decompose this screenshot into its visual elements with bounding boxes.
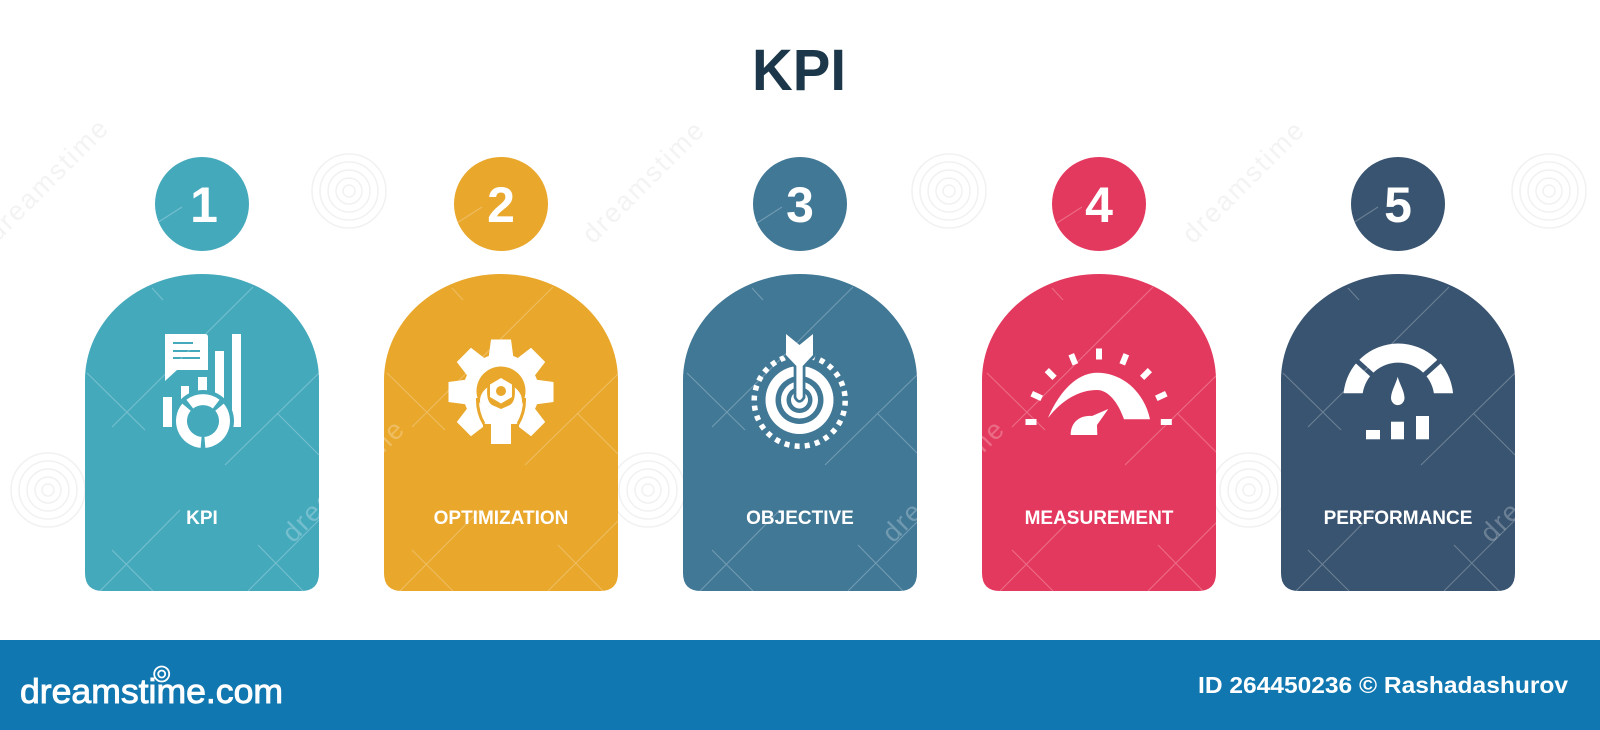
logo: dreamstime.com: dreamstime.com: [20, 673, 283, 711]
panel: step 5 Performance: [1281, 157, 1515, 591]
number badge 5: 5: [1384, 177, 1412, 233]
number badge 1: 1: [190, 177, 218, 233]
number badge 2: 2: [487, 177, 515, 233]
card 5: [1281, 274, 1515, 591]
number badge 3: 3: [786, 177, 814, 233]
icon: performance gauge with drop and bars: [1344, 344, 1453, 439]
infographic canvas: dreamstime: [576, 114, 711, 249]
icon: chart with speech bubble and donut: [163, 334, 241, 452]
panel: step 2 Optimization: [384, 157, 618, 591]
label: Optimization: OPTIMIZATION: [434, 508, 568, 529]
icon: target with arrow: [754, 334, 845, 446]
card 3: [683, 274, 917, 591]
number badge 5: [1351, 157, 1445, 251]
infographic canvas: dreamstime: [876, 413, 1011, 548]
label: KPI: KPI: [186, 508, 218, 529]
number badge 4: 4: [1085, 177, 1113, 233]
card 4: [982, 274, 1216, 591]
label: Measurement: MEASUREMENT: [1025, 508, 1174, 529]
icon: speedometer gauge: [1026, 348, 1172, 435]
panel: step 1 KPI: [85, 157, 319, 591]
icon: gear with wrench: [448, 340, 554, 444]
number badge 4: [1052, 157, 1146, 251]
panel: step 4 Measurement: [982, 157, 1216, 591]
number badge 2: [454, 157, 548, 251]
label: Objective: OBJECTIVE: [746, 508, 854, 529]
infographic canvas: dreamstime: [1176, 114, 1311, 249]
panel: step 3 Objective: [683, 157, 917, 591]
footer band: [0, 640, 1600, 730]
number badge 1: [155, 157, 249, 251]
card 2: [384, 274, 618, 591]
label: Performance: PERFORMANCE: [1324, 508, 1472, 529]
infographic canvas: dreamstime: [276, 413, 411, 548]
image id and author credit: ID 264450236 © Rashadashurov: [1198, 672, 1568, 698]
number badge 3: [753, 157, 847, 251]
title: KPI: [752, 38, 846, 103]
card 1: [85, 274, 319, 591]
